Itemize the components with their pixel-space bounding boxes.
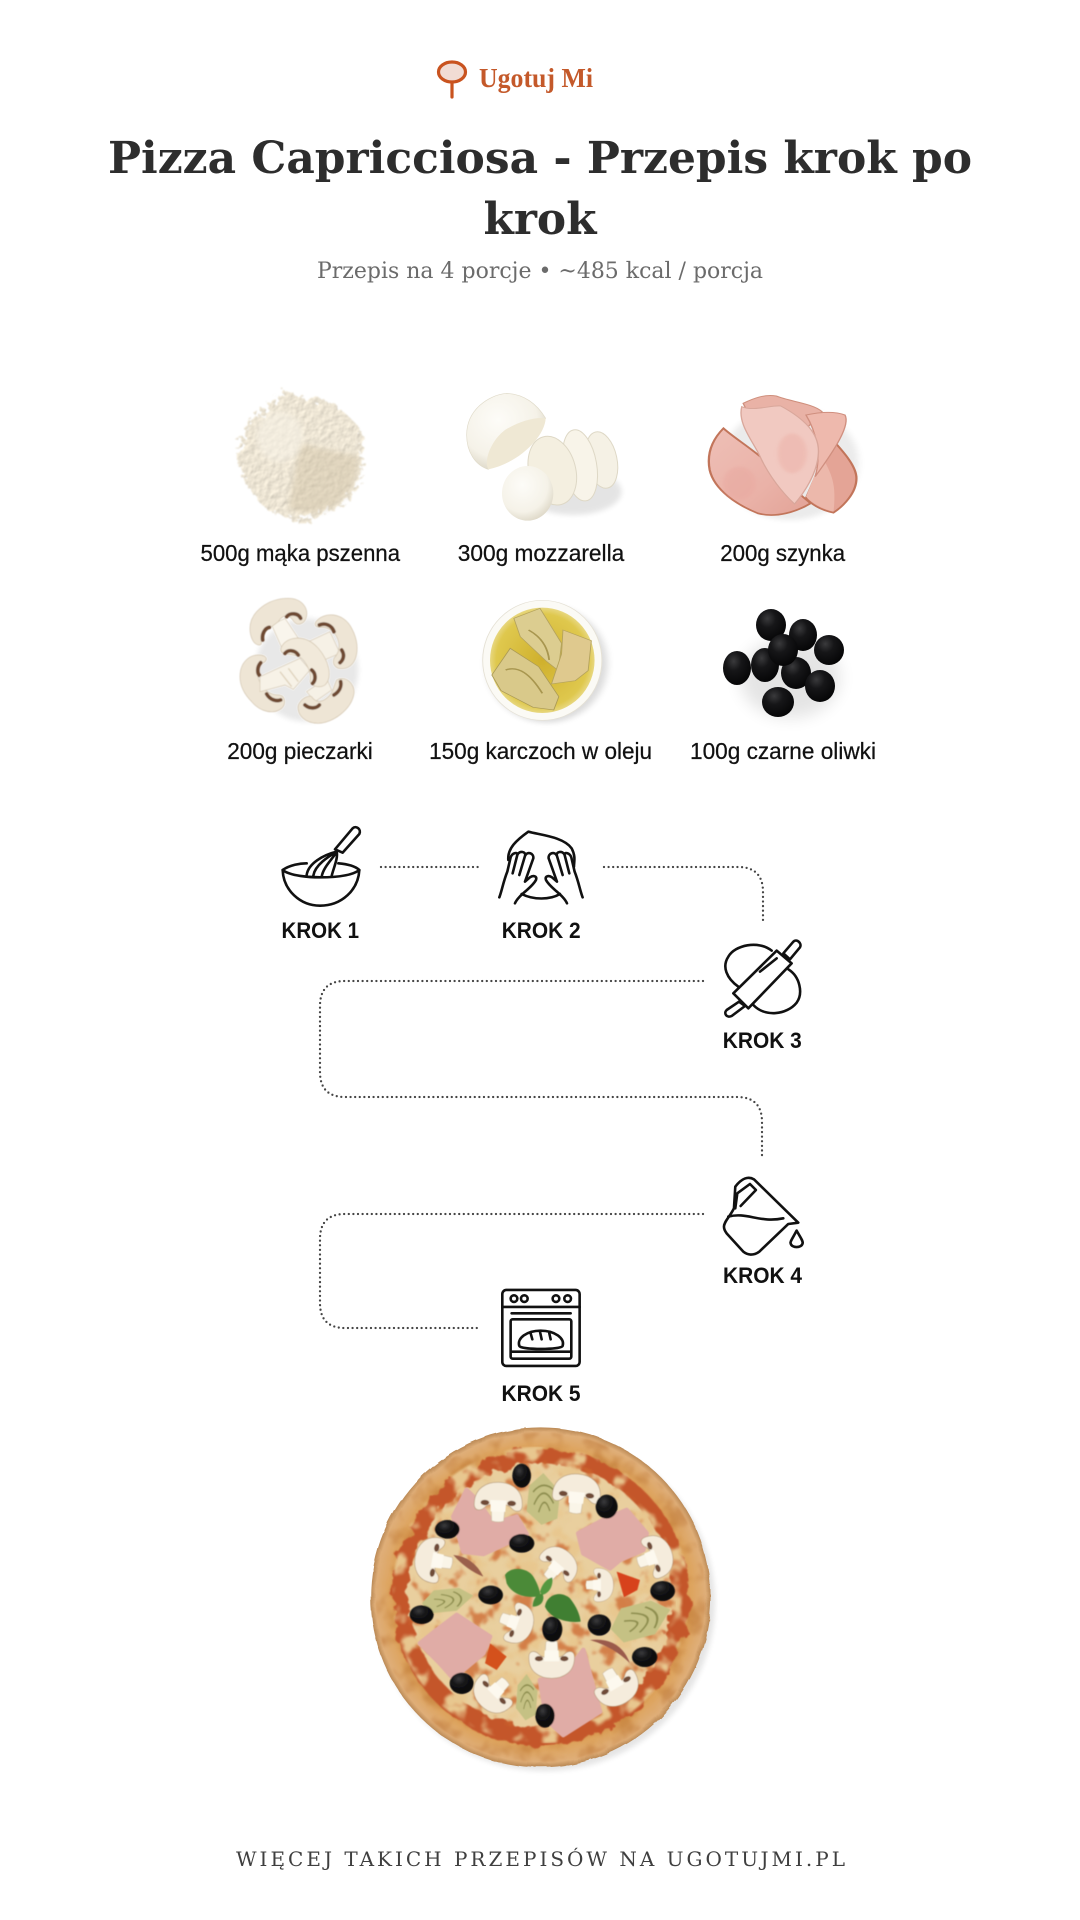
second slice	[557, 427, 603, 504]
step 3	[723, 941, 802, 1053]
ingredient: black olives	[723, 609, 844, 718]
label: olives: 100g czarne oliwki	[690, 738, 876, 764]
center slice	[260, 638, 329, 692]
step 1	[282, 827, 360, 943]
label: krok 4: KROK 4	[723, 1263, 803, 1288]
big ball	[467, 393, 546, 469]
ingredient: mushrooms	[240, 598, 358, 723]
artichoke pieces	[527, 1473, 560, 1525]
finished pizza	[371, 1427, 715, 1771]
right back slice	[806, 438, 856, 513]
ham pieces	[420, 1490, 647, 1735]
ingredient: artichokes in oil	[483, 600, 607, 723]
label: artichokes: 150g karczoch w oleju	[429, 738, 652, 764]
label: flour: 500g mąka pszenna	[201, 540, 400, 566]
back slice	[743, 395, 822, 427]
olives	[410, 1464, 675, 1728]
title: krok	[484, 194, 598, 245]
label: ham: 200g szynka	[720, 540, 845, 566]
first slice	[521, 431, 584, 511]
artichoke pieces	[514, 608, 562, 671]
left slice	[240, 655, 285, 712]
step 2	[499, 832, 583, 943]
toppings	[410, 1464, 679, 1735]
label: krok 1: KROK 1	[282, 918, 359, 943]
bowl	[483, 600, 602, 720]
icon: hands kneading dough	[499, 832, 583, 903]
center slice	[741, 406, 818, 504]
ingredient: flour	[239, 392, 363, 520]
third slice	[581, 429, 623, 491]
connector: step 1 to 2	[381, 866, 481, 868]
icon: whisk in bowl	[283, 827, 360, 906]
label: krok 2: KROK 2	[502, 918, 581, 943]
title	[108, 133, 972, 245]
icon: pouring jug	[724, 1178, 803, 1255]
mushrooms	[474, 1481, 523, 1523]
connector: step 4 to 5	[320, 1214, 703, 1328]
icon: oven with bread	[502, 1290, 580, 1366]
label: mushrooms: 200g pieczarki	[227, 738, 373, 764]
icon: magnifier pin	[438, 62, 466, 97]
connector: step 2 to 3	[604, 867, 763, 923]
sauce	[392, 1449, 689, 1746]
bottom slice	[298, 678, 354, 723]
subtitle: Przepis na 4 porcje • ~485 kcal / porcja	[317, 259, 763, 284]
right slice	[305, 615, 357, 669]
connector: step 3 to 4	[320, 981, 762, 1158]
right slice	[806, 412, 846, 477]
logo	[438, 62, 593, 97]
panel: ingredients	[201, 392, 876, 764]
crust	[371, 1427, 711, 1767]
small ball	[502, 466, 553, 521]
label: krok 3: KROK 3	[723, 1028, 802, 1053]
basil	[505, 1569, 581, 1622]
footer: WIĘCEJ TAKICH PRZEPISÓW NA UGOTUJMI.PL	[236, 1846, 845, 1871]
step 5	[502, 1290, 580, 1406]
pepper and onion accents	[617, 1572, 640, 1597]
ingredient: mozzarella	[467, 393, 623, 521]
label: mozzarella: 300g mozzarella	[458, 540, 624, 566]
icon: rolling pin on dough	[725, 941, 801, 1017]
top slice	[250, 598, 307, 655]
oil	[490, 608, 595, 713]
ingredient: ham	[709, 395, 859, 520]
cheese	[409, 1463, 672, 1727]
left slice	[709, 428, 811, 515]
title: Pizza Capricciosa - Przepis krok po	[108, 133, 972, 184]
step 4	[723, 1178, 803, 1288]
logo wordmark: Ugotuj Mi	[479, 63, 593, 93]
label: krok 5: KROK 5	[502, 1381, 580, 1406]
